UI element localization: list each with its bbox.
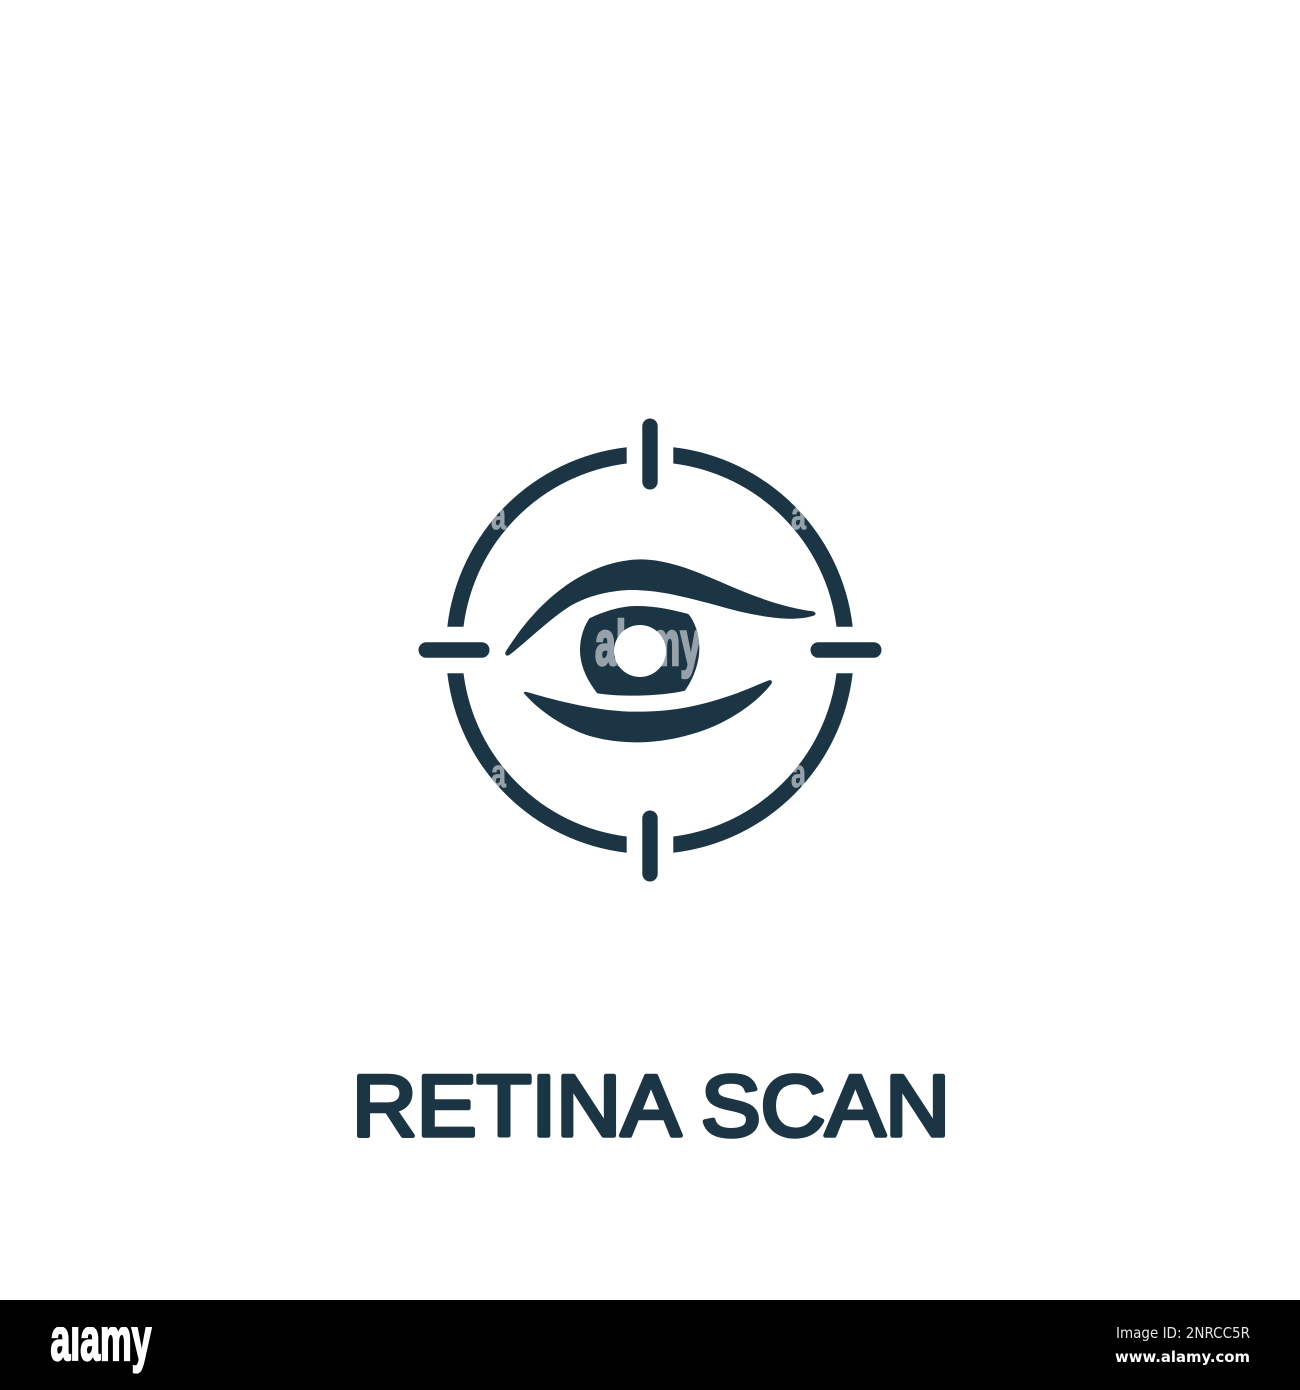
footer bar bbox=[0, 1300, 1300, 1390]
footer logo: alamy: alamy bbox=[50, 1306, 152, 1373]
watermark on iris: alamy bbox=[595, 609, 701, 679]
watermark on ring: a bbox=[791, 494, 807, 538]
target ring bbox=[447, 447, 853, 853]
infographic canvas bbox=[0, 418, 1300, 1390]
footer image id: Image ID: 2NRCC5R bbox=[1116, 1324, 1250, 1342]
upper eyelid bbox=[505, 559, 816, 656]
icon: retina scan target bbox=[418, 418, 882, 882]
watermark on ring: a bbox=[491, 752, 507, 796]
iris bbox=[580, 606, 699, 696]
lower eyelid bbox=[524, 680, 772, 742]
eye bbox=[505, 559, 816, 742]
watermark on ring: a bbox=[491, 494, 507, 538]
pupil bbox=[614, 625, 666, 677]
title: RETINA SCAN: RETINA SCAN bbox=[352, 1058, 950, 1154]
watermark on ring: a bbox=[791, 752, 807, 796]
footer website: www.alamy.com bbox=[1115, 1348, 1250, 1366]
watermark on ring bbox=[491, 494, 807, 796]
crosshair ticks bbox=[418, 418, 882, 882]
